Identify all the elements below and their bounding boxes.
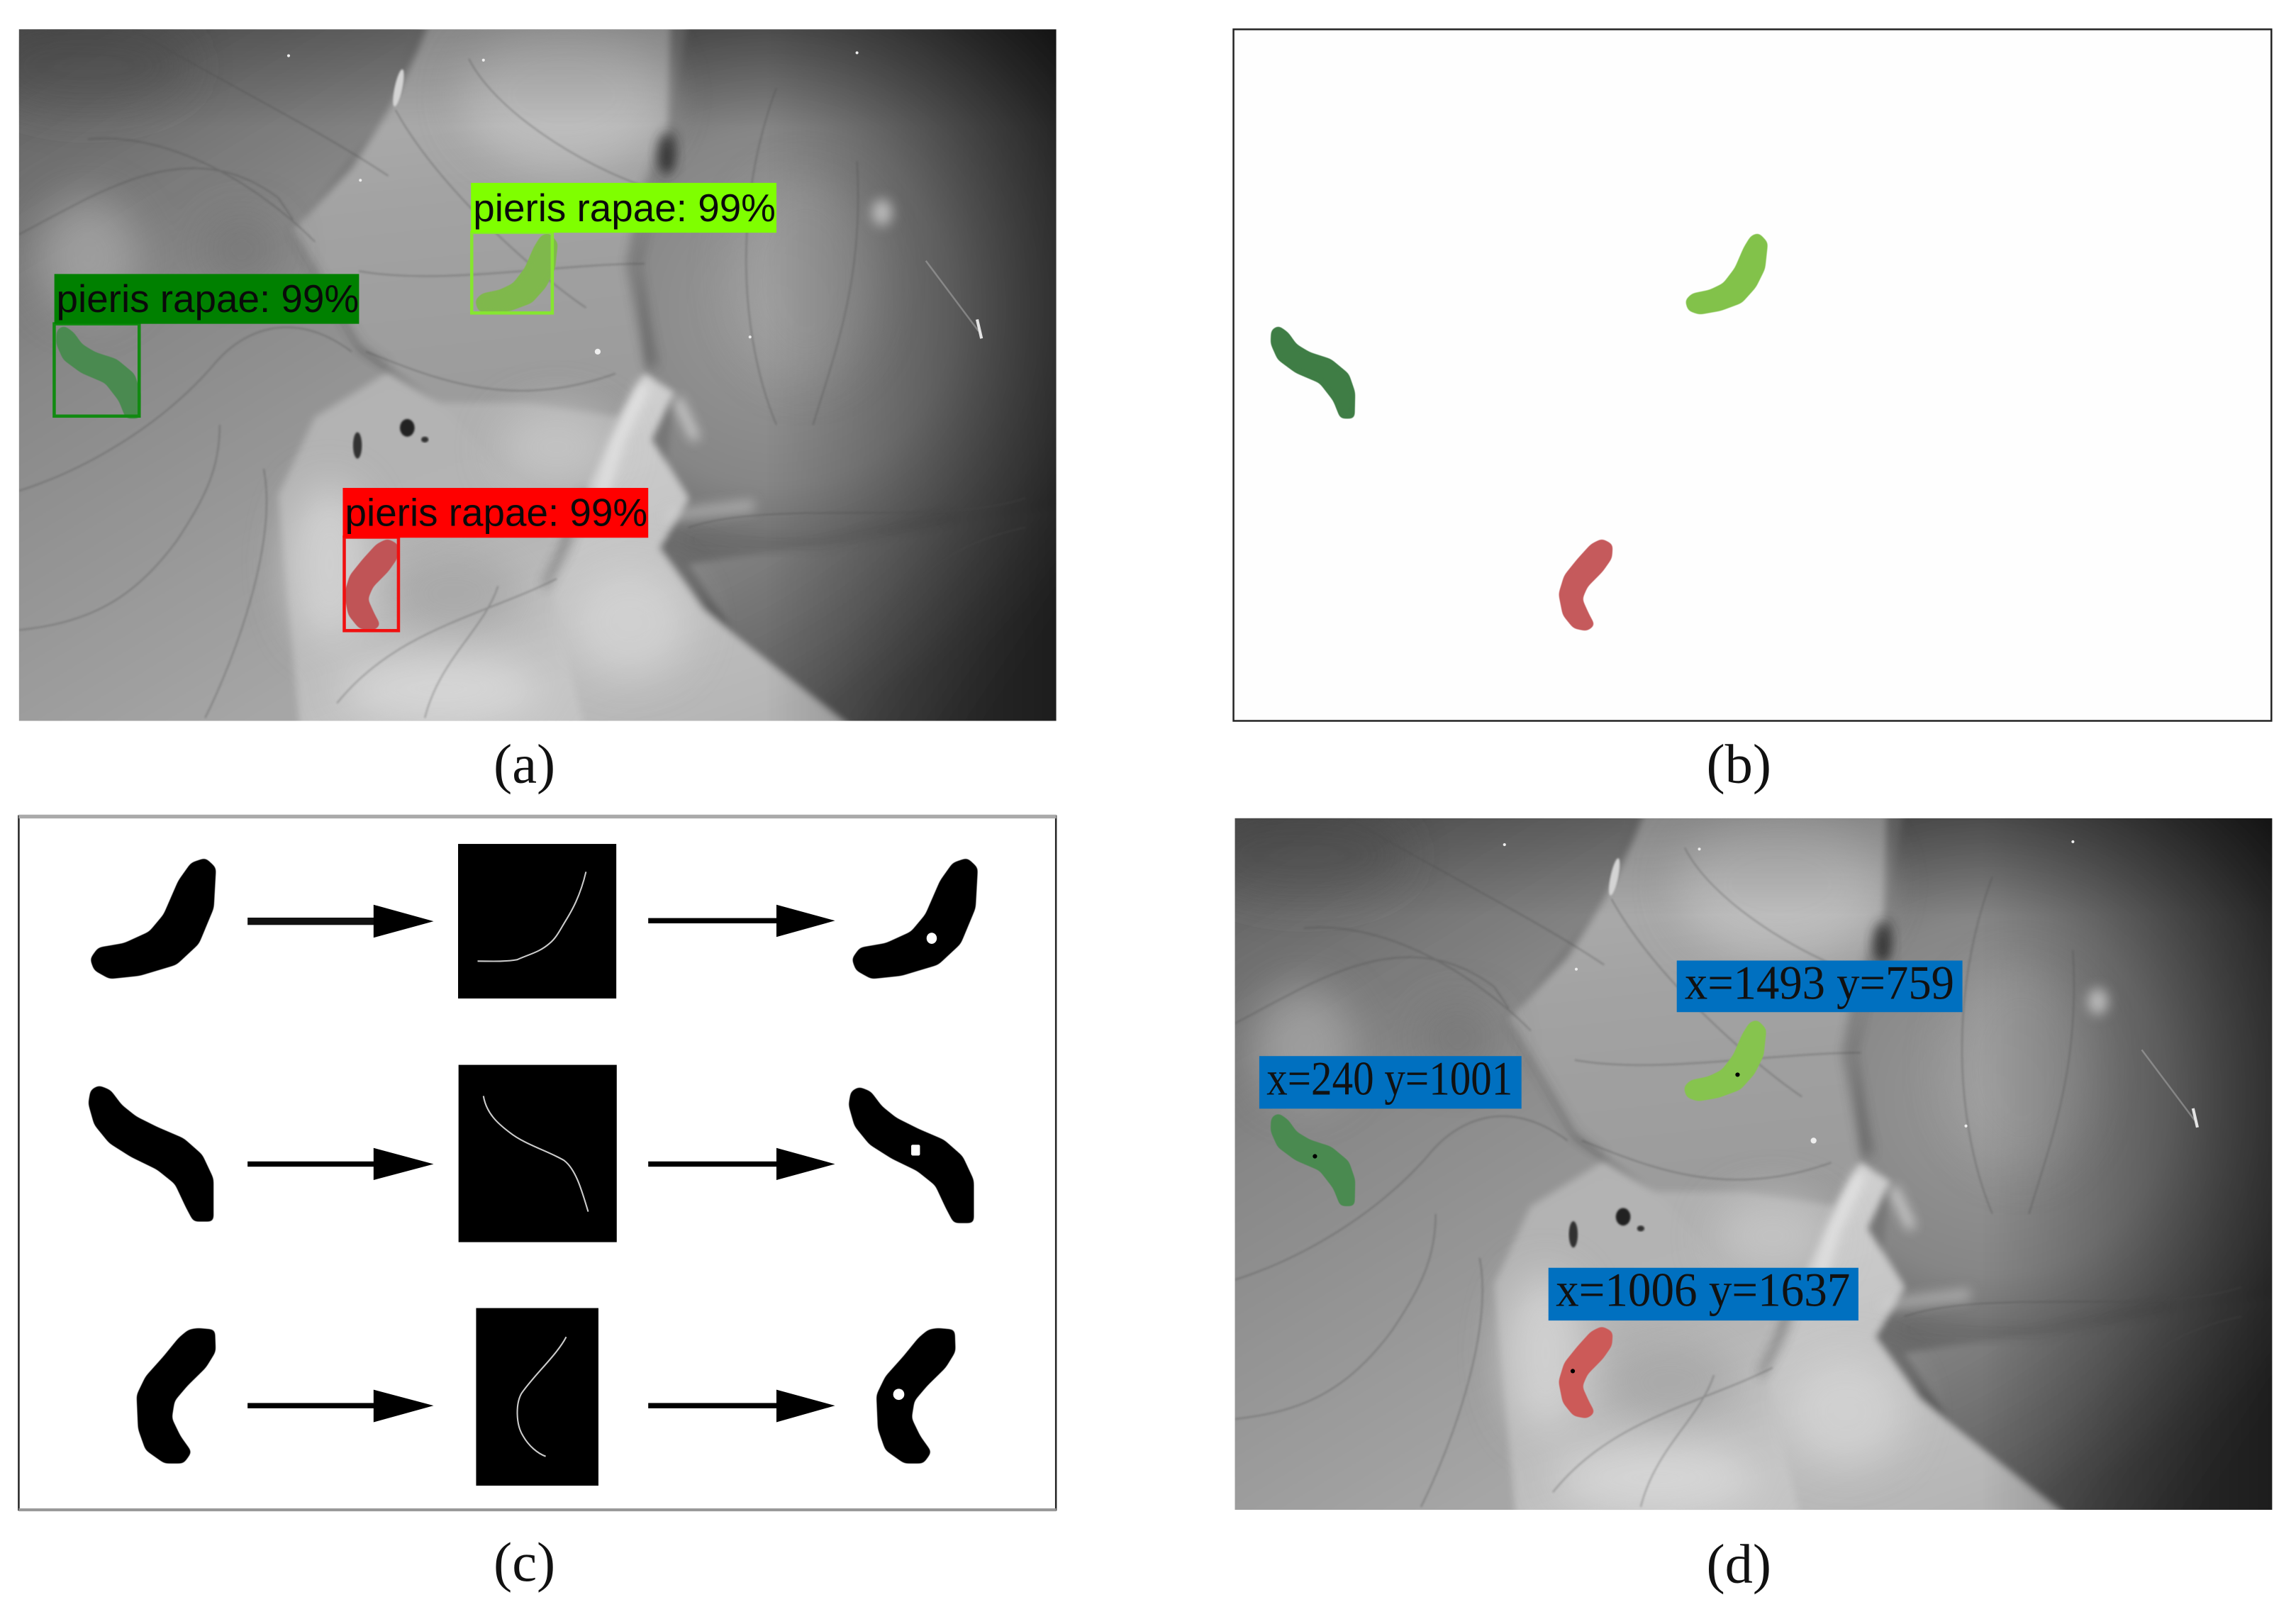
- arrow 2 left: [247, 1148, 434, 1180]
- row 3 flow: [138, 1308, 954, 1486]
- mask: light green larva d: [1685, 1020, 1766, 1101]
- mask: red larva b: [1559, 540, 1612, 630]
- mask: dark green larva b: [1271, 327, 1354, 418]
- panel d: located centre coordinates: [1201, 803, 2285, 1522]
- panel b: segmentation masks: [1234, 29, 2271, 721]
- panel b frame: [1234, 29, 2271, 721]
- leaf photograph a: [0, 15, 1069, 733]
- coordinate label red: x=1006 y=1637: [1556, 1263, 1850, 1317]
- arrow 3 right: [648, 1390, 835, 1422]
- leaf photograph d: [1201, 803, 2285, 1522]
- detection box: light green: pieris rapae: 99%: [473, 187, 776, 230]
- larva with centre point 3: [878, 1329, 954, 1462]
- panel c frame: [18, 816, 1057, 1510]
- larva silhouette 3: [138, 1329, 215, 1462]
- panel c: skeleton extraction flow: [18, 816, 1057, 1510]
- mask: dark green larva a: [57, 327, 140, 418]
- detection box: dark green: [54, 274, 359, 416]
- row 1 flow: [91, 844, 976, 998]
- larva silhouette 2: [89, 1086, 213, 1220]
- caption d: (d): [1707, 1532, 1771, 1594]
- panel a: detection result on leaf photo: [0, 15, 1069, 733]
- arrow 1 left: [247, 905, 434, 938]
- larva silhouette 1: [91, 859, 215, 977]
- mask: red larva a: [345, 540, 397, 630]
- larva with centre point 2: [849, 1088, 973, 1222]
- larva with centre point 1: [853, 859, 976, 977]
- mask: light green larva b: [1686, 234, 1767, 313]
- mask: light green larva a: [476, 234, 557, 313]
- detection box: dark green: pieris rapae: 99%: [57, 277, 359, 321]
- skeleton image 2: [459, 1065, 617, 1242]
- mask: dark green larva d: [1271, 1114, 1354, 1205]
- row 2 flow: [89, 1065, 973, 1242]
- detection box: red: pieris rapae: 99%: [345, 491, 647, 535]
- caption a: (a): [494, 733, 555, 794]
- caption c: (c): [494, 1531, 555, 1593]
- skeleton image 1: [458, 844, 616, 998]
- arrow 2 right: [648, 1148, 835, 1180]
- detection box: light green: [471, 183, 776, 313]
- caption b: (b): [1707, 733, 1771, 794]
- mask: red larva d: [1559, 1328, 1612, 1418]
- coordinate label dark green: x=240 y=1001: [1266, 1052, 1512, 1106]
- coordinate label light green: x=1493 y=759: [1685, 955, 1954, 1009]
- arrow 1 right: [648, 905, 835, 937]
- skeleton image 3: [476, 1308, 598, 1486]
- detection box: red: [342, 488, 648, 630]
- arrow 3 left: [247, 1390, 434, 1422]
